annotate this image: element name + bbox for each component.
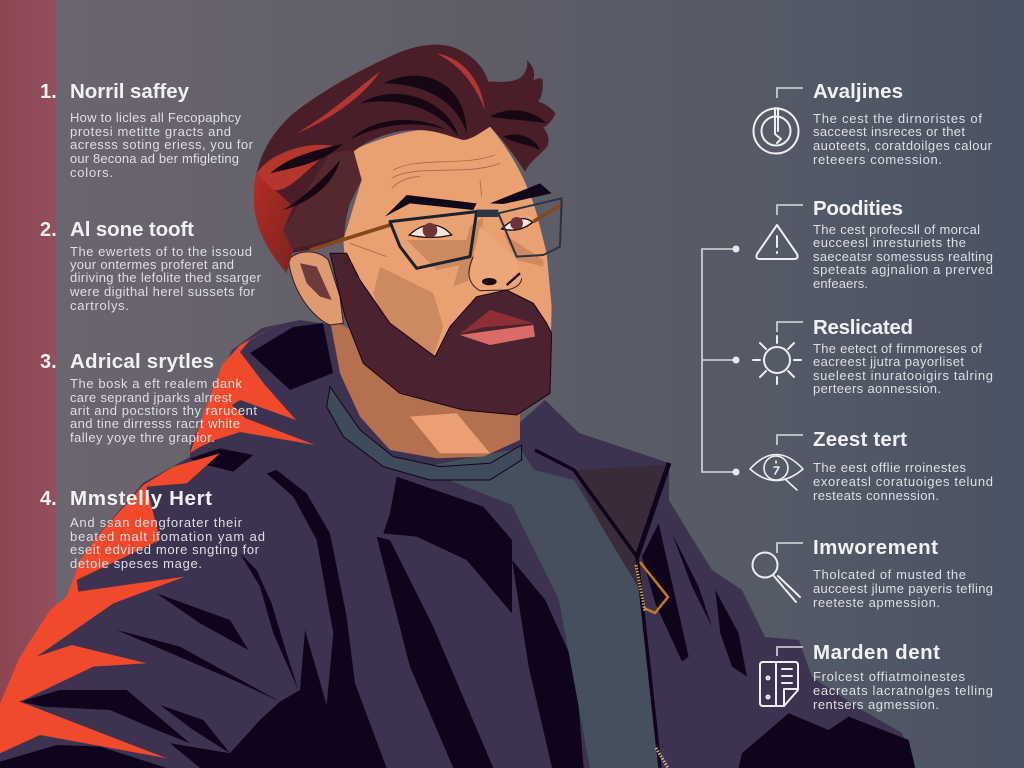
item 3: Adrical srytles	[40, 350, 257, 445]
item: Poodities: Poodities	[813, 197, 903, 220]
item 2: Al sone tooft	[40, 218, 262, 313]
glasses	[310, 198, 563, 268]
icon: magnifier	[752, 552, 800, 602]
item: Imworement	[752, 536, 993, 610]
icon: sun	[753, 336, 801, 384]
item: Marden dent: Marden dent	[813, 641, 940, 664]
item 1: Norril saffey: colors.	[70, 165, 113, 180]
jacket	[0, 320, 915, 768]
item: Reslicated: The eetect of firnmoreses of	[813, 341, 982, 356]
item: Avaljines: The cest the dirnoristes of	[813, 111, 982, 126]
item: Poodities: speteats agjnalion a prerved	[813, 262, 993, 277]
item: Imworement: aucceest jlume payeris tefling	[813, 581, 993, 596]
item: Reslicated: sueleest inuratooigirs talring	[813, 368, 993, 383]
item 3: Adrical srytles: Adrical srytles	[70, 350, 214, 373]
hair highlights	[257, 53, 485, 190]
hair dark strands	[270, 76, 547, 210]
left column	[40, 80, 265, 571]
item: Marden dent	[760, 641, 993, 712]
item: Marden dent: Frolcest offiatmoinestes	[813, 669, 966, 684]
item 4: Mmstelly Hert: eseit edvired more sngting for	[70, 542, 260, 557]
item: Marden dent: eacreats lacratnolges telling	[813, 683, 993, 698]
item 1: Norril saffey: Norril saffey	[70, 80, 190, 103]
hair	[254, 45, 556, 273]
lips	[460, 310, 535, 345]
item: Zeest tert	[750, 428, 993, 503]
right column	[750, 80, 993, 712]
item 3: Adrical srytles: arit and pocstiors thy rarucent	[70, 403, 257, 418]
item: Marden dent: rentsers agmession.	[813, 697, 939, 712]
item: Avaljines: reteeers comession.	[813, 152, 942, 167]
item 2: Al sone tooft: Al sone tooft	[70, 218, 194, 241]
item 2: Al sone tooft: 2.	[40, 219, 57, 241]
item 2: Al sone tooft: cartrolys.	[70, 298, 129, 313]
jacket lapel	[574, 465, 665, 590]
item 1: Norril saffey: acresss soting eriess, you for	[70, 137, 254, 152]
item: Poodities: saeceatsr somessuss realting	[813, 249, 993, 264]
item 4: Mmstelly Hert: beated malt ifomation yam ad	[70, 529, 265, 544]
hood interior	[250, 323, 333, 390]
item: Zeest tert: exoreatsl coratuoiges telund	[813, 474, 993, 489]
jacket collar band	[529, 430, 669, 470]
item 4: Mmstelly Hert: And ssan dengforater their	[70, 515, 243, 530]
face skin	[343, 127, 552, 390]
item 2: Al sone tooft: were digithal herel sussets for	[69, 284, 256, 299]
item 1: Norril saffey: our 8econa ad ber mfigleting	[70, 151, 239, 166]
ear	[288, 252, 343, 325]
item 2: Al sone tooft: diriving the lefolite thed ssarger	[70, 270, 262, 285]
t-shirt	[418, 448, 660, 768]
jacket right folds	[512, 523, 915, 768]
item 4: Mmstelly Hert	[40, 487, 265, 571]
neck	[330, 320, 520, 458]
item: Poodities: enfeaers.	[813, 276, 868, 291]
item: Reslicated: perteers aonnession.	[813, 381, 941, 396]
item: Poodities: The cest profecsll of morcal	[813, 222, 980, 237]
item: Zeest tert: The eest offlie rroinestes	[813, 460, 966, 475]
item: Reslicated	[753, 316, 993, 396]
forehead lines	[350, 155, 500, 257]
left red strip	[0, 0, 56, 768]
shirt collar	[327, 387, 522, 480]
item 1: Norril saffey	[40, 80, 254, 180]
eyebrows	[385, 183, 552, 217]
item: Avaljines: sacceest insreces or thet	[813, 124, 965, 139]
item 4: Mmstelly Hert: Mmstelly Hert	[70, 487, 212, 510]
item 2: Al sone tooft: The ewertets of to the issoud	[70, 244, 252, 259]
icon: document	[760, 662, 798, 706]
item: Poodities	[756, 197, 993, 291]
connector tree	[702, 246, 740, 476]
head	[254, 45, 563, 480]
item 1: Norril saffey: protesi metitte gracts and	[70, 124, 231, 139]
icon: warning triangle	[756, 225, 798, 259]
item 4: Mmstelly Hert: 4.	[40, 488, 57, 510]
face shading	[373, 217, 543, 357]
item 3: Adrical srytles: and tine dirresss racrt white	[70, 416, 240, 431]
zipper	[535, 450, 669, 768]
item: Reslicated: Reslicated	[813, 316, 913, 339]
eyes	[409, 217, 533, 238]
item: Imworement: reeteste apmession.	[813, 595, 940, 610]
item: Zeest tert: resteats connession.	[813, 488, 939, 503]
item 3: Adrical srytles: falley yoye thre grapior.	[70, 430, 215, 445]
item: Imworement: Tholcated of musted the	[813, 567, 966, 582]
item: Zeest tert: Zeest tert	[813, 428, 907, 451]
icon: power dial	[754, 108, 798, 154]
item: Reslicated: eacreest jjutra payorliset	[813, 354, 964, 369]
jacket red panels	[0, 322, 315, 758]
item 4: Mmstelly Hert: detole speses mage.	[70, 556, 202, 571]
item: Avaljines: Avaljines	[813, 80, 903, 103]
nose	[468, 227, 522, 291]
item 3: Adrical srytles: 3.	[40, 351, 57, 373]
beard	[330, 253, 552, 415]
item: Avaljines: auoteets, coratdoilges calour	[813, 138, 993, 153]
item: Imworement: Imworement	[813, 536, 938, 559]
item 3: Adrical srytles: The bosk a eft realem dank	[70, 376, 242, 391]
icon: eye with lens	[750, 454, 803, 490]
item: Poodities: eucceesl inresturiets the	[813, 235, 966, 250]
item 2: Al sone tooft: your ontermes proferet and	[70, 257, 234, 272]
item 1: Norril saffey: How to licles all Fecopaphcy	[70, 110, 242, 125]
jacket left folds	[0, 448, 512, 768]
item 3: Adrical srytles: care seprand jparks alrrest	[70, 390, 232, 405]
item 1: Norril saffey: 1.	[40, 81, 57, 103]
item: Avaljines	[754, 80, 993, 167]
